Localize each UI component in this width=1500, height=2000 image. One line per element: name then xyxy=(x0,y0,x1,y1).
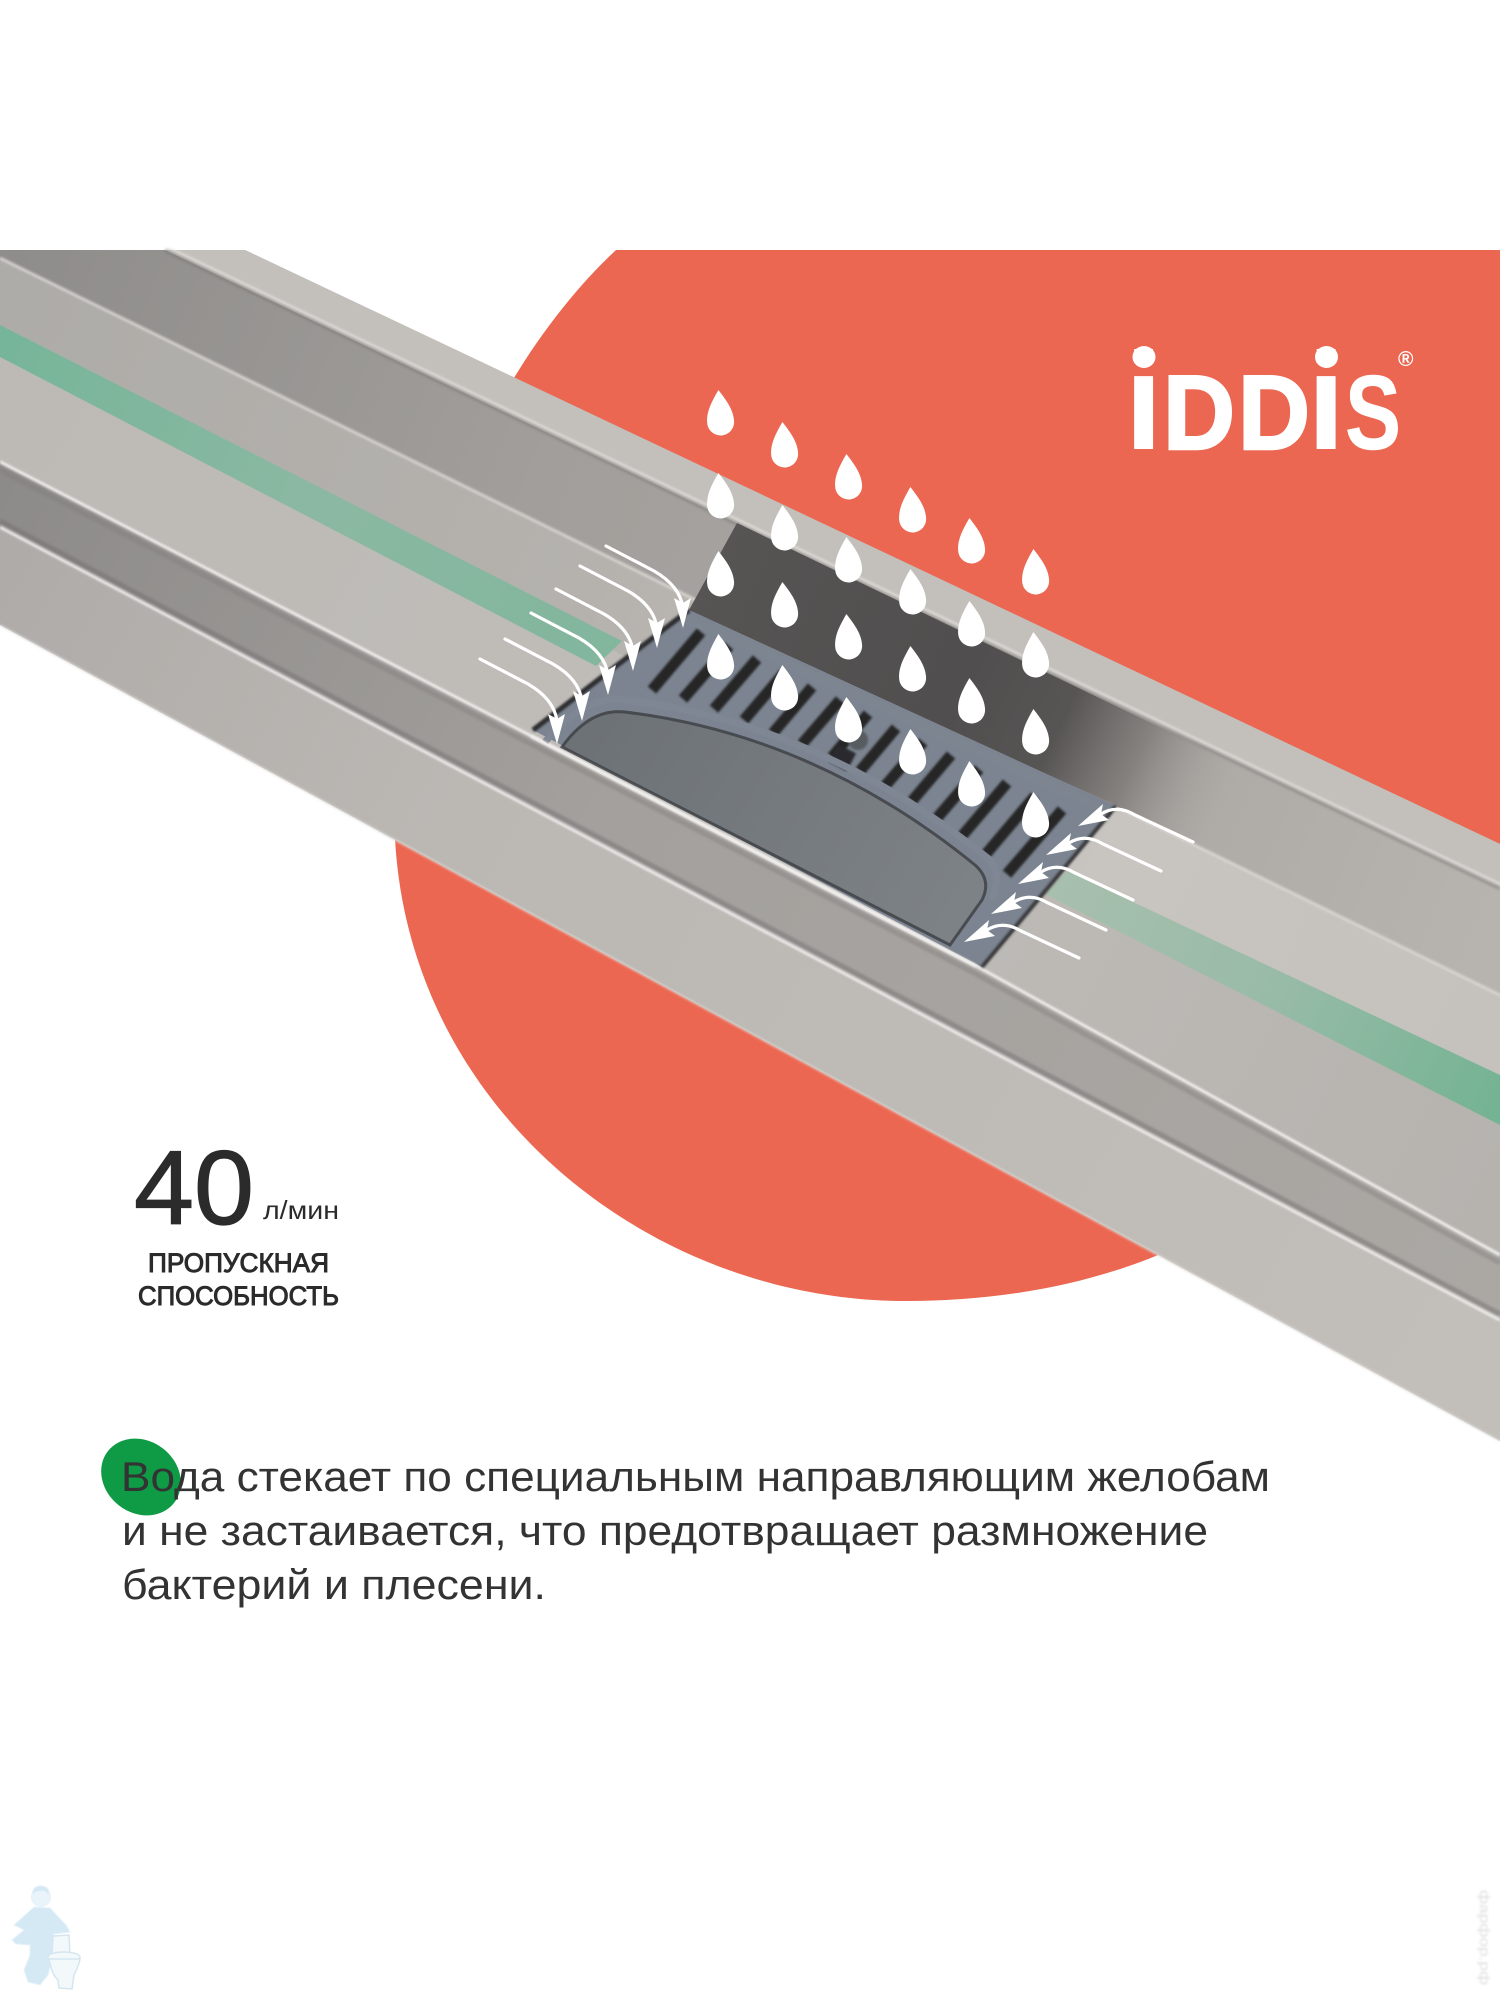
grate side channels xyxy=(533,610,1116,967)
lower light band xyxy=(0,527,1500,1441)
watermark: plumber xyxy=(12,1886,80,1989)
green stripe: right xyxy=(1045,871,1500,1125)
arrow 4 xyxy=(531,613,616,695)
toilet xyxy=(48,1935,80,1989)
logo: IDDIS: ® xyxy=(1398,348,1414,371)
steel drain channel xyxy=(0,248,1500,1441)
plate lower edge highlight xyxy=(531,736,976,966)
stat value: 40 xyxy=(134,1130,254,1247)
stat label: СПОСОБНОСТЬ xyxy=(138,1281,339,1311)
center peg xyxy=(829,730,868,771)
outer rim band xyxy=(165,250,1500,890)
body text: и не застаивается, что предотвращает размножение xyxy=(122,1507,1208,1554)
grate slots xyxy=(652,632,1062,874)
logo: IDDIS: D xyxy=(1163,354,1235,472)
arrow 6 xyxy=(480,659,565,744)
arrow 5 xyxy=(505,639,590,721)
lower gutter band xyxy=(0,462,1500,1320)
coral background shape xyxy=(395,250,1500,1301)
logo: IDDIS xyxy=(1124,325,1414,479)
cover plate xyxy=(562,712,986,945)
arrow 3 xyxy=(1018,862,1133,900)
arrow 3 xyxy=(556,589,641,671)
channel base xyxy=(0,250,1500,1441)
upper gutter band xyxy=(0,250,1500,995)
drain grate xyxy=(531,610,1116,967)
arrows: left group xyxy=(480,546,691,744)
logo: IDDIS: S xyxy=(1345,354,1401,472)
body text: Вода стекает по специальным направляющим желобам xyxy=(121,1453,1270,1500)
arrow 2 xyxy=(1046,833,1161,871)
stat label xyxy=(138,1248,339,1311)
green stripe: left xyxy=(0,325,622,666)
grate base xyxy=(533,610,1116,967)
arrow 2 xyxy=(580,566,665,648)
logo: IDDIS: i xyxy=(1307,325,1345,479)
green accent blob xyxy=(86,1423,196,1531)
logo: IDDIS: D xyxy=(1238,354,1310,472)
arrow 5 xyxy=(964,920,1079,958)
plumber body xyxy=(12,1907,70,1985)
arrows: right group xyxy=(964,804,1193,958)
logo: IDDIS: i xyxy=(1124,325,1163,479)
watermark: vertical site name: фарфор.рф xyxy=(1477,1890,1493,1985)
middle surface band xyxy=(0,340,1500,1255)
plumber head xyxy=(32,1888,50,1906)
arrow 1 xyxy=(1078,804,1193,842)
body text xyxy=(121,1453,1270,1608)
stat: flow capacity xyxy=(134,1130,339,1311)
dark gutter recess above grate xyxy=(689,523,1240,866)
water drops xyxy=(705,389,1050,838)
upper surface band xyxy=(0,258,1500,1100)
arrow 1 xyxy=(606,546,691,628)
arrow 4 xyxy=(991,892,1106,930)
stat unit: л/мин xyxy=(263,1195,339,1225)
stat label: ПРОПУСКНАЯ xyxy=(148,1248,329,1278)
channel highlight lines xyxy=(0,248,1500,1441)
grate top rib xyxy=(686,617,1112,813)
body text: бактерий и плесени. xyxy=(122,1561,546,1608)
rim around plate xyxy=(545,699,997,900)
